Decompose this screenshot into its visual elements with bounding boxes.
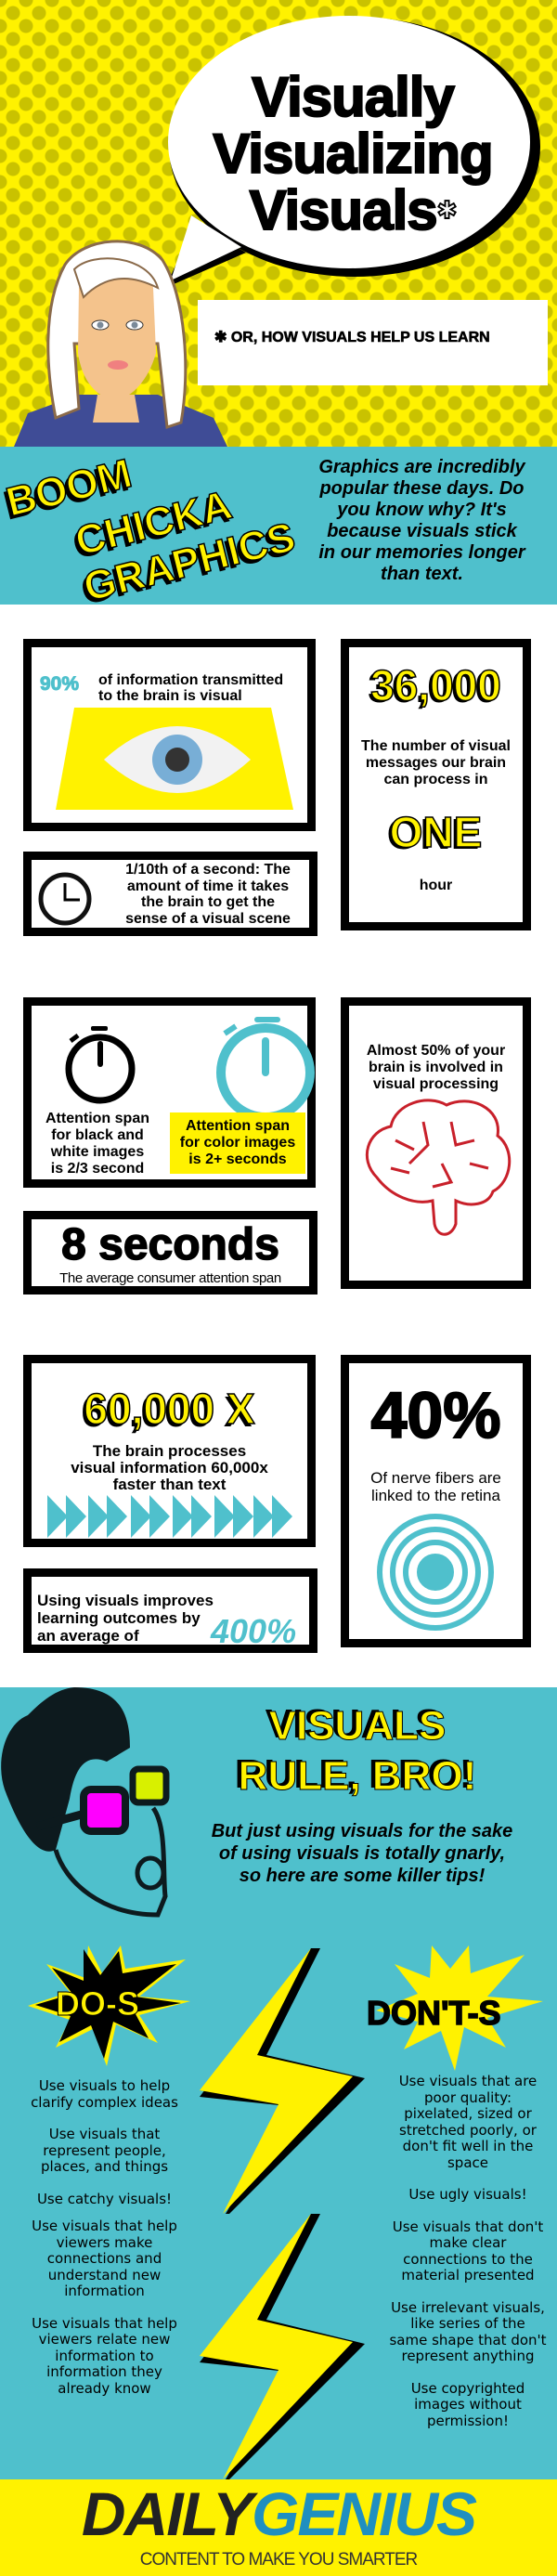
icon: concentric circles <box>377 1514 494 1631</box>
intro text: popular these days. Do <box>319 478 525 499</box>
panel: 400%: Using visuals improves <box>37 1592 214 1609</box>
list: do-s: Use visuals that <box>49 2126 160 2142</box>
list: don't-s: Use irrelevant visuals, <box>391 2299 545 2316</box>
title text: Visualizing <box>213 123 493 185</box>
header: polka dot background <box>0 0 557 447</box>
panel: 1/10th second: the brain to get the <box>141 894 275 910</box>
icon: black stopwatch <box>65 1026 136 1103</box>
list: don't-s <box>389 2073 547 2429</box>
panel: 36,000: The number of visual <box>361 738 511 754</box>
panel: 8 seconds: 8 seconds <box>61 1220 279 1269</box>
icon: eye <box>56 708 293 810</box>
panel: 50% brain: brain is involved in <box>369 1060 503 1075</box>
yellow highlight text: is 2+ seconds <box>188 1151 287 1167</box>
panel: 60,000x: 60,000 X <box>84 1385 255 1433</box>
panel: 36,000 <box>341 639 531 930</box>
list: don't-s: images without <box>414 2396 522 2413</box>
heading: visuals rule bro: VISUALS <box>269 1703 446 1749</box>
panel: 40%: 40% <box>370 1379 501 1451</box>
panel: 50% brain: Almost 50% of your <box>367 1043 505 1059</box>
icon: do-s starburst: DO-S <box>56 1984 139 2023</box>
stat ONE: ONE <box>390 808 482 856</box>
illustration: guy with 3D glasses <box>1 1687 169 1917</box>
panel: 400%: learning outcomes by <box>37 1609 201 1627</box>
list: don't-s: Use copyrighted <box>411 2379 525 2396</box>
heading: boom chicka graphics <box>2 450 300 610</box>
panel: 40%: linked to the retina <box>371 1487 500 1504</box>
list: don't-s: pixelated, sized or <box>404 2105 532 2122</box>
intro text: Graphics are incredibly <box>318 457 525 477</box>
list: do-s: Use visuals to help <box>39 2077 170 2094</box>
list: don't-s: connections to the <box>403 2251 533 2268</box>
panel: 1/10th second: amount of time it takes <box>127 878 289 893</box>
list: do-s: clarify complex ideas <box>31 2093 178 2110</box>
teal band <box>0 447 557 605</box>
list: do-s: information they <box>46 2363 162 2380</box>
panel: 1/10th second <box>23 852 317 936</box>
yellow highlight text: Attention span <box>186 1118 290 1134</box>
list: don't-s: like series of the <box>410 2315 525 2332</box>
icon: fast forward arrows <box>47 1495 292 1538</box>
list: do-s: represent people, <box>43 2141 166 2158</box>
logo: daily genius: DAILYGENIUS <box>82 2479 475 2548</box>
list: don't-s: Use ugly visuals! <box>408 2186 527 2203</box>
heading: visuals rule bro <box>238 1703 476 1799</box>
footer <box>0 2479 557 2576</box>
panel: 40%: Of nerve fibers are <box>370 1469 501 1487</box>
panel: 60,000x: The brain processes <box>93 1442 246 1460</box>
icon: do-s starburst <box>28 1945 190 2066</box>
list: do-s <box>31 2077 178 2396</box>
heading: boom chicka graphics: BOOM <box>2 450 136 526</box>
title text: Visuals✱ <box>250 179 456 241</box>
list: don't-s: stretched poorly, or <box>399 2121 537 2138</box>
panel: 36,000: messages our brain <box>366 755 506 771</box>
icon: teal stopwatch <box>216 1017 315 1112</box>
panel: 400%: an average of <box>37 1627 139 1645</box>
icon: clock <box>39 873 91 925</box>
panel: 36,000: can process in <box>383 772 488 787</box>
heading: boom chicka graphics: CHICKA <box>71 482 236 565</box>
list: do-s: Use visuals that help <box>32 2218 177 2234</box>
intro text: because visuals stick <box>327 521 517 541</box>
panel: 60,000x: visual information 60,000x <box>71 1459 268 1477</box>
panel: 60,000x: faster than text <box>113 1476 226 1493</box>
panel: attention span: for black and <box>51 1127 144 1143</box>
icon: don't-s starburst <box>367 1945 543 2071</box>
tips intro text: But just using visuals for the sake <box>212 1821 512 1841</box>
tips intro text <box>212 1821 512 1886</box>
list: do-s: viewers relate new <box>39 2331 170 2348</box>
tips intro text: of using visuals is totally gnarly, <box>219 1843 505 1864</box>
stat 90%: 90% <box>40 673 79 695</box>
list: don't-s: don't fit well in the <box>403 2138 533 2154</box>
panel: attention span: is 2/3 second <box>51 1161 144 1177</box>
yellow highlight text <box>170 1112 305 1174</box>
panel: attention span <box>23 997 316 1188</box>
panel: 400% <box>23 1568 317 1653</box>
subtitle banner <box>198 300 548 385</box>
tagline: CONTENT TO MAKE YOU SMARTER <box>140 2550 417 2569</box>
tips intro text: so here are some killer tips! <box>240 1866 485 1886</box>
list: don't-s: Use visuals that are <box>399 2073 537 2089</box>
stat 36,000: 36,000 <box>370 661 501 709</box>
heading: boom chicka graphics: GRAPHICS <box>79 514 300 610</box>
title text: Visually <box>252 66 454 128</box>
intro text <box>318 457 526 584</box>
panel: 8 seconds <box>23 1211 317 1295</box>
list: don't-s: poor quality: <box>424 2089 512 2106</box>
panel: 40% <box>341 1355 531 1647</box>
list: do-s: connections and <box>47 2250 162 2267</box>
yellow highlight text: for color images <box>180 1135 295 1151</box>
list: don't-s: space <box>447 2154 488 2171</box>
panel: 60,000x <box>23 1355 316 1547</box>
icon: lightning bolts <box>200 1948 365 2479</box>
panel: 90% visual: to the brain is visual <box>98 688 242 704</box>
list: don't-s: Use visuals that don't <box>393 2218 543 2234</box>
list: don't-s: permission! <box>427 2413 509 2429</box>
panel: 90% visual <box>23 639 316 831</box>
list: do-s: already know <box>58 2379 151 2396</box>
panel: 50% brain <box>341 997 531 1289</box>
panel: 50% brain: visual processing <box>373 1076 499 1092</box>
list: do-s: information to <box>55 2348 154 2364</box>
illustration: woman <box>14 240 227 447</box>
list: do-s: Use catchy visuals! <box>37 2190 172 2206</box>
subtitle banner: ✱ OR, HOW VISUALS HELP US LEARN <box>214 330 490 345</box>
intro text: you know why? It's <box>337 500 507 520</box>
heading: visuals rule bro: RULE, BRO! <box>239 1753 476 1799</box>
panel: attention span: white images <box>51 1144 144 1160</box>
list: don't-s: represent anything <box>401 2348 535 2364</box>
list: do-s: information <box>64 2283 145 2299</box>
list: don't-s: same shape that don't <box>389 2331 547 2348</box>
panel: 8 seconds: The average consumer attention span <box>59 1270 281 1286</box>
panel: 36,000: hour <box>420 878 452 893</box>
icon: brain <box>366 1099 511 1236</box>
intro text: in our memories longer <box>318 542 525 563</box>
tips section background <box>0 1687 557 2479</box>
speech bubble title <box>168 16 540 284</box>
panel: 90% visual: of information transmitted <box>98 672 283 688</box>
panel: attention span: Attention span <box>45 1111 149 1126</box>
panel: 400%: 400% <box>211 1612 296 1650</box>
list: do-s: understand new <box>48 2266 161 2283</box>
title text <box>212 66 493 241</box>
panel: 1/10th second: 1/10th of a second: The <box>125 862 291 878</box>
list: don't-s: make clear <box>430 2234 506 2251</box>
list: don't-s: material presented <box>401 2267 535 2283</box>
list: do-s: Use visuals that help <box>32 2314 177 2331</box>
icon: don't-s starburst: DON'T-S <box>367 1994 501 2032</box>
panel: 1/10th second: sense of a visual scene <box>125 910 291 927</box>
list: do-s: viewers make <box>57 2234 152 2251</box>
list: do-s: places, and things <box>41 2158 168 2175</box>
intro text: than text. <box>381 564 463 584</box>
